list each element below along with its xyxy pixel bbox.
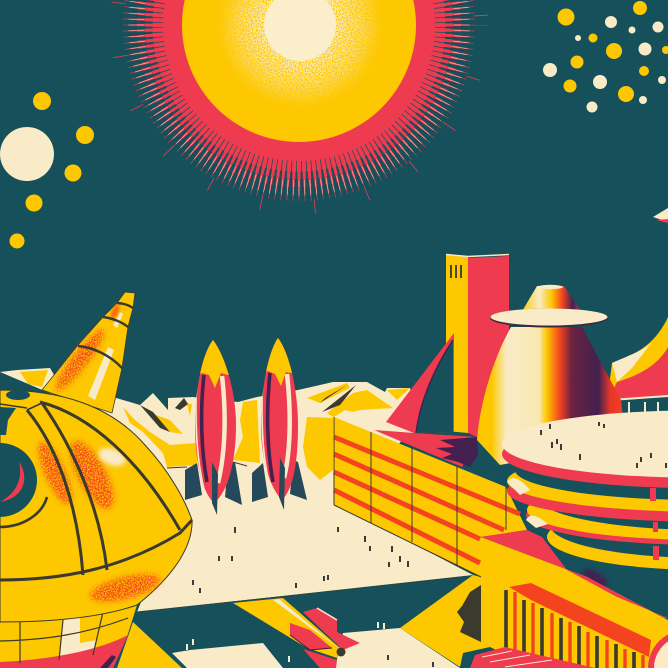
tiny people on plazas [186, 422, 667, 667]
stacked disc building [502, 410, 668, 620]
standing rocket left [185, 335, 242, 515]
planet and moons left [0, 92, 94, 248]
long striped building [334, 410, 527, 577]
sun [117, 0, 481, 207]
ufo top right [653, 208, 668, 223]
lower teal ground and plazas [117, 575, 481, 668]
front yellow building [463, 530, 668, 668]
standing rocket right [252, 333, 307, 510]
mountains [0, 368, 420, 510]
lying rocket [233, 598, 360, 668]
red tent [607, 317, 668, 414]
plaza [137, 468, 473, 612]
star dots top right [543, 1, 668, 112]
round red corner feature [648, 634, 668, 668]
dome tower [0, 390, 192, 668]
tower [446, 254, 509, 437]
red sail [386, 333, 454, 433]
cone building with hat [477, 285, 625, 465]
dome spire [42, 292, 135, 413]
